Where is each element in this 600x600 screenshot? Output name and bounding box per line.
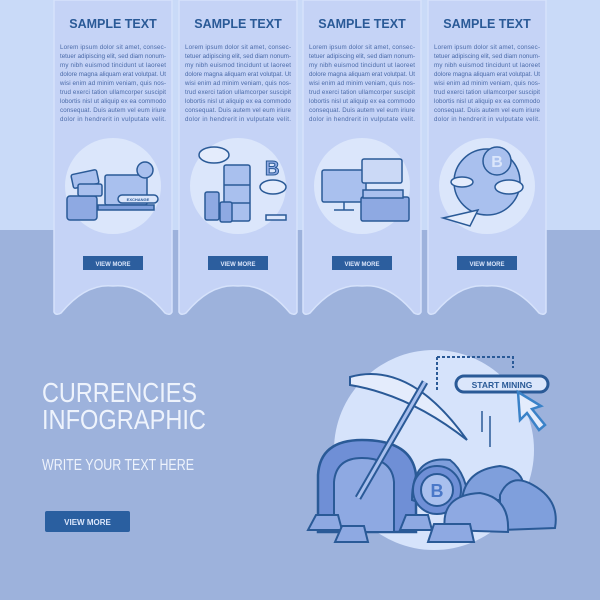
body text 4: trud exerci tation ullamcorper suscipit (434, 89, 540, 96)
body text 3: consequat. Duis autem vel eum iriure (309, 107, 416, 114)
body text 3: tetuer adipiscing elit, sed diam nonum- (309, 53, 415, 60)
body text 1: dolor in hendrerit in vulputate velit. (60, 116, 166, 123)
body text 1: tetuer adipiscing elit, sed diam nonum- (60, 53, 166, 60)
banner 4 (428, 0, 546, 314)
body text 2: Lorem ipsum dolor sit amet, consec- (185, 44, 291, 51)
banner 3 (303, 0, 421, 314)
subtitle: WRITE YOUR TEXT HERE (42, 457, 194, 474)
icon: cursor (518, 392, 545, 430)
body text 4: dolor in hendrerit in vulputate velit. (434, 116, 540, 123)
button 1 (83, 256, 143, 270)
main title: CURRENCIES (42, 377, 197, 408)
body text 3: Lorem ipsum dolor sit amet, consec- (309, 44, 415, 51)
body text 2: my nibh euismod tincidunt ut laoreet (185, 62, 291, 69)
body text 2: tetuer adipiscing elit, sed diam nonum- (185, 53, 291, 60)
body text 4: tetuer adipiscing elit, sed diam nonum- (434, 53, 540, 60)
main button: VIEW MORE (64, 518, 111, 527)
body text 3: trud exerci tation ullamcorper suscipit (309, 89, 415, 96)
button 3 (332, 256, 392, 270)
body text 4: lobortis nisl ut aliquip ex ea commodo (434, 98, 541, 105)
heading 1: SAMPLE TEXT (69, 17, 157, 31)
body text 1: lobortis nisl ut aliquip ex ea commodo (60, 98, 167, 105)
banner 2 (179, 0, 297, 314)
illustration: mining: B (430, 481, 444, 501)
body text 4: dolore magna aliquam erat volutpat. Ut (434, 71, 540, 78)
body text 4 (433, 44, 541, 123)
icon: servers and cloud (190, 138, 286, 234)
body text 1: my nibh euismod tincidunt ut laoreet (60, 62, 166, 69)
body text 2 (184, 44, 292, 123)
start mining button (456, 376, 548, 392)
body text 3 (308, 44, 416, 123)
body text 4: Lorem ipsum dolor sit amet, consec- (434, 44, 540, 51)
body text 4: wisi enim ad minim veniam, quis nos- (433, 80, 540, 87)
body text 1: consequat. Duis autem vel eum iriure (60, 107, 167, 114)
start mining button: START MINING (472, 380, 533, 390)
body text 3: dolor in hendrerit in vulputate velit. (309, 116, 415, 123)
icon: globe (439, 138, 535, 234)
banner 1: EXCHANGE (127, 197, 150, 202)
main title (42, 377, 206, 435)
button 1: VIEW MORE (95, 262, 131, 268)
body text 1: dolore magna aliquam erat volutpat. Ut (60, 71, 166, 78)
illustration: mining (308, 350, 556, 550)
body text 2: dolore magna aliquam erat volutpat. Ut (185, 71, 291, 78)
heading 2: SAMPLE TEXT (194, 17, 282, 31)
banner 1 (54, 0, 172, 314)
main button (45, 511, 130, 532)
body text 1: wisi enim ad minim veniam, quis nos- (59, 80, 166, 87)
heading 4: SAMPLE TEXT (443, 17, 531, 31)
main title: INFOGRAPHIC (42, 404, 206, 435)
icon: exchange (65, 138, 161, 234)
body text 4: my nibh euismod tincidunt ut laoreet (434, 62, 540, 69)
body text 3: my nibh euismod tincidunt ut laoreet (309, 62, 415, 69)
icon: globe: B (491, 154, 503, 171)
body text 2: trud exerci tation ullamcorper suscipit (185, 89, 291, 96)
icon: login and wallet (314, 138, 410, 234)
button 4: VIEW MORE (469, 262, 505, 268)
body text 4: consequat. Duis autem vel eum iriure (434, 107, 541, 114)
button 4 (457, 256, 517, 270)
icon: servers and cloud: B (265, 158, 279, 180)
heading 3: SAMPLE TEXT (318, 17, 406, 31)
body text 1: Lorem ipsum dolor sit amet, consec- (60, 44, 166, 51)
body text 1: trud exerci tation ullamcorper suscipit (60, 89, 166, 96)
body text 2: dolor in hendrerit in vulputate velit. (185, 116, 291, 123)
body text 3: wisi enim ad minim veniam, quis nos- (308, 80, 415, 87)
body text 3: dolore magna aliquam erat volutpat. Ut (309, 71, 415, 78)
body text 2: consequat. Duis autem vel eum iriure (185, 107, 292, 114)
button 2: VIEW MORE (220, 262, 256, 268)
button 3: VIEW MORE (344, 262, 380, 268)
button 2 (208, 256, 268, 270)
body text 3: lobortis nisl ut aliquip ex ea commodo (309, 98, 416, 105)
body text 2: lobortis nisl ut aliquip ex ea commodo (185, 98, 292, 105)
body text 2: wisi enim ad minim veniam, quis nos- (184, 80, 291, 87)
body text 1 (59, 44, 167, 123)
